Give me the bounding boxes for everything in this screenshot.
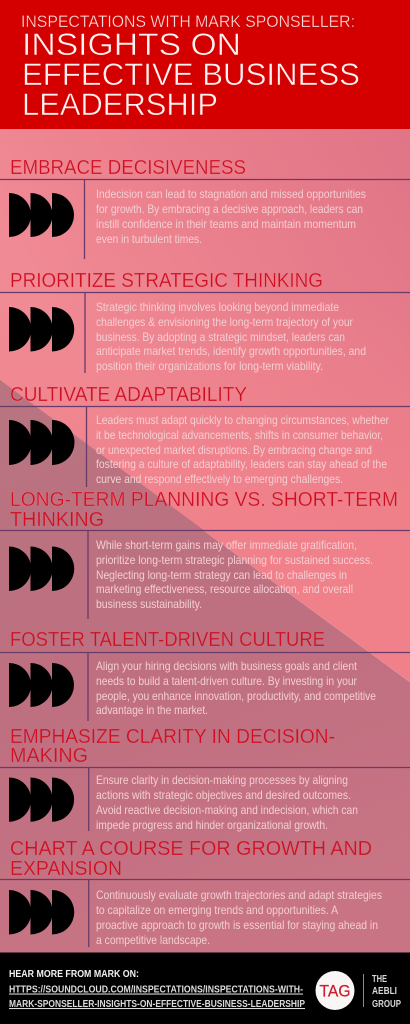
heading: MAKING (10, 744, 88, 767)
body text (96, 414, 389, 486)
body text: marketing effectiveness, resource allocation, and overall (96, 583, 353, 596)
icon: three half circles (9, 778, 74, 822)
heading: CHART A COURSE FOR GROWTH AND (10, 837, 372, 860)
body text: prioritize long-term strategic planning for sustained success. (96, 554, 373, 567)
icon: three half circles (9, 193, 74, 237)
main title: LEADERSHIP (22, 86, 218, 122)
body text: instill confidence in their teams and maintain momentum (96, 218, 356, 231)
icon: three half circles (9, 663, 74, 707)
body text: business. By adopting a strategic mindset, leaders can (96, 331, 345, 344)
body text: proactive approach to growth is essential for staying ahead in (96, 919, 378, 932)
body text: anticipate market trends, identify growth opportunities, and (96, 345, 366, 358)
main title: EFFECTIVE BUSINESS (22, 56, 360, 92)
icon: three half circles (9, 307, 74, 352)
body text: even in turbulent times. (96, 233, 202, 246)
podcast link: MARK-SPONSELLER-INSIGHTS-ON-EFFECTIVE-BUSINESS-LEADERSHIP (9, 998, 305, 1010)
panel: foster talent-driven culture (0, 628, 410, 721)
body text: curve and respond effectively to emerging challenges. (96, 473, 343, 486)
body text: Indecision can lead to stagnation and missed opportunities (96, 188, 366, 201)
logo: TAG circle: TAG (320, 982, 350, 1000)
body text: a competitive landscape. (96, 934, 210, 947)
heading: EMBRACE DECISIVENESS (10, 156, 246, 179)
body text: Strategic thinking involves looking beyond immediate (96, 301, 339, 314)
body text: actions with strategic objectives and desired outcomes. (96, 789, 351, 802)
body text (96, 660, 376, 717)
body text: needs to build a talent-driven culture. By investing in your (96, 675, 357, 688)
header banner (0, 0, 410, 129)
icon: three half circles (9, 890, 74, 934)
body text: Ensure clarity in decision-making processes by aligning (96, 774, 348, 787)
footer call to action: HEAR MORE FROM MARK ON: (9, 968, 139, 980)
main title (22, 26, 360, 122)
body text: Continuously evaluate growth trajectories and adapt strategies (96, 889, 382, 902)
heading (10, 725, 335, 767)
body text (96, 301, 366, 373)
heading (10, 837, 372, 880)
panel: prioritize strategic thinking (0, 269, 410, 373)
panel: long-term planning (0, 488, 410, 619)
logo wordmark: THE (372, 974, 387, 985)
body text (96, 774, 358, 832)
footer (0, 952, 410, 1024)
subtitle: INSPECTATIONS WITH MARK SPONSELLER: (21, 13, 355, 31)
body text: While short-term gains may offer immediate gratification, (96, 539, 357, 552)
heading: CULTIVATE ADAPTABILITY (10, 383, 247, 406)
podcast link: HTTPS://SOUNDCLOUD.COM/INSPECTATIONS/INSPECTATIONS-WITH- (9, 984, 303, 996)
body text: business sustainability. (96, 598, 202, 611)
heading (10, 488, 398, 531)
logo wordmark: AEBLI (372, 986, 397, 997)
body text: Neglecting long-term strategy can lead to challenges in (96, 569, 347, 582)
main title: INSIGHTS ON (22, 26, 241, 62)
heading: PRIORITIZE STRATEGIC THINKING (10, 269, 323, 292)
heading: FOSTER TALENT-DRIVEN CULTURE (10, 628, 325, 651)
heading: EMPHASIZE CLARITY IN DECISION- (10, 725, 335, 748)
icon: three half circles (9, 546, 74, 591)
logo wordmark (372, 974, 401, 1010)
body text: position their organizations for long-term viability. (96, 360, 323, 373)
body text: challenges & envisioning the long-term trajectory of your (96, 316, 353, 329)
body text (96, 188, 366, 246)
heading: EXPANSION (10, 857, 122, 880)
body text (96, 539, 373, 611)
body text: advantage in the market. (96, 704, 208, 717)
body text: impede progress and hinder organizational growth. (96, 819, 328, 832)
panel: cultivate adaptability (0, 383, 410, 487)
panel: embrace decisiveness (0, 156, 410, 259)
body text: Avoid reactive decision-making and indecision, which can (96, 804, 358, 817)
body text: people, you enhance innovation, productivity, and competitive (96, 690, 376, 703)
icon: three half circles (9, 420, 74, 465)
body text: for growth. By embracing a decisive approach, leaders can (96, 203, 363, 216)
panel: chart a course (0, 837, 410, 947)
body text: or unexpected market disruptions. By embracing change and (96, 444, 372, 457)
podcast link (9, 984, 305, 1010)
panel: emphasize clarity (0, 725, 410, 832)
logo wordmark: GROUP (372, 999, 401, 1010)
logo: TAG circle (316, 971, 354, 1010)
body text: to capitalize on emerging trends and opportunities. A (96, 904, 338, 917)
body text: Align your hiring decisions with business goals and client (96, 660, 358, 673)
heading: THINKING (10, 508, 104, 531)
body text (96, 889, 382, 947)
